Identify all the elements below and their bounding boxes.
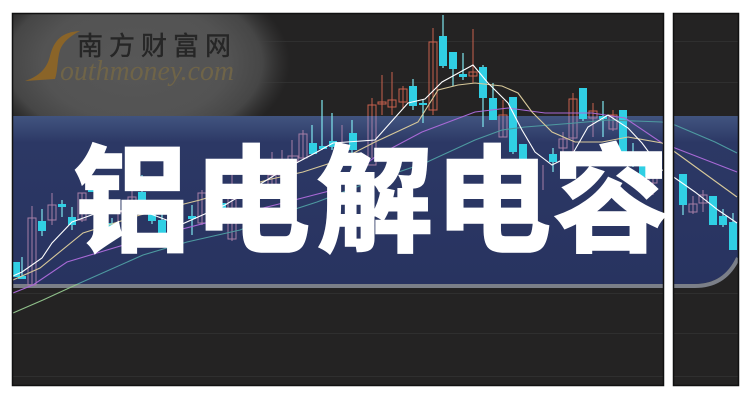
logo swoosh S — [25, 31, 80, 81]
logo chinese name: 南方财富网 — [77, 26, 237, 63]
logo latin name: outhmoney.com — [60, 56, 234, 87]
title: 容 — [553, 108, 669, 276]
title: 解 — [317, 108, 433, 276]
title: 铝 — [74, 108, 190, 276]
right chart panel — [672, 12, 740, 386]
title: 电 — [435, 108, 551, 276]
watermark logo — [25, 26, 237, 87]
title: 电 — [194, 108, 310, 276]
